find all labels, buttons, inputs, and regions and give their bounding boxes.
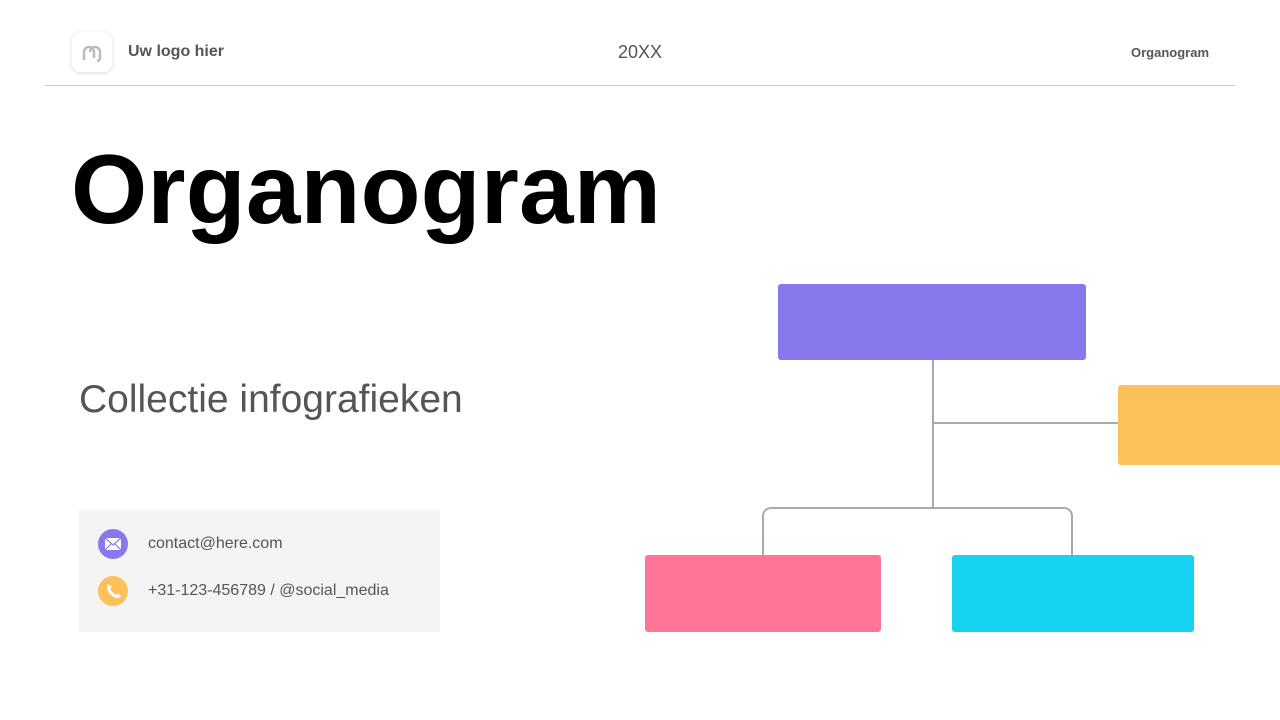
year: 20XX bbox=[618, 42, 662, 62]
contact panel bbox=[79, 510, 440, 632]
logo text: Uw logo hier bbox=[128, 43, 224, 60]
subtitle: Collectie infografieken bbox=[79, 378, 463, 421]
title: Organogram bbox=[71, 134, 661, 244]
contact phone: +31-123-456789 / @social_media bbox=[148, 582, 389, 599]
box: left bbox=[645, 555, 881, 632]
contact email: contact@here.com bbox=[148, 535, 283, 552]
org chart bbox=[645, 284, 1280, 632]
header label: Organogram bbox=[1131, 45, 1209, 60]
icon: mail bbox=[98, 529, 128, 559]
box: top bbox=[778, 284, 1086, 360]
logo icon bbox=[72, 32, 112, 72]
box: side bbox=[1118, 385, 1280, 465]
box: right bbox=[952, 555, 1194, 632]
icon: phone bbox=[98, 576, 128, 606]
